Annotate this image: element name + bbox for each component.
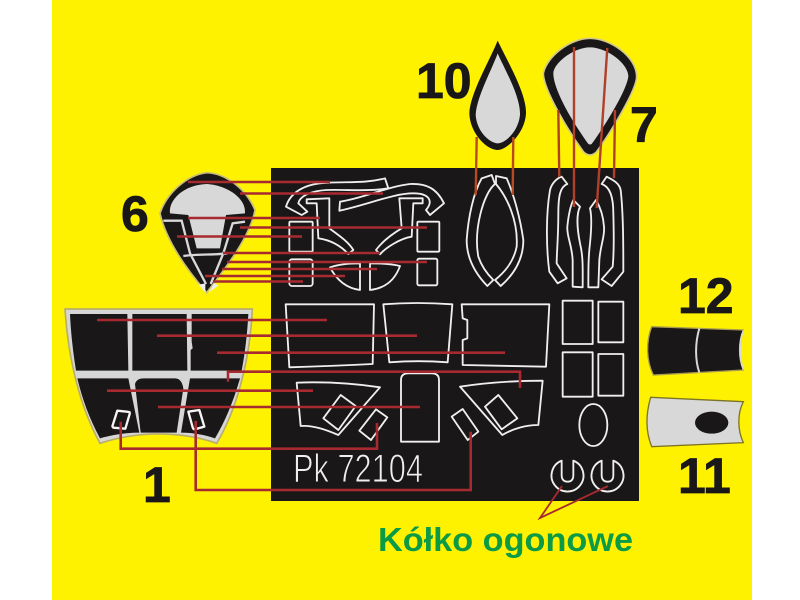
mask outlines: small windows, oval and tail wheel rings	[551, 301, 623, 492]
part number 6: 6	[121, 186, 149, 242]
tail wheel label: Kółko ogonowe	[378, 521, 633, 558]
part 1: main canopy drawing	[65, 309, 252, 443]
part number 12: 12	[678, 268, 734, 324]
part number 10: 10	[416, 53, 472, 109]
panel: black mask sheet	[271, 168, 639, 501]
part number 7: 7	[630, 97, 658, 153]
part 7: rounded triangular window drawing	[543, 38, 637, 155]
part number 11: 11	[678, 448, 731, 504]
part 12: black tail cone drawing	[648, 327, 743, 375]
part 10: teardrop window drawing	[469, 41, 526, 150]
part 11: grey tail cone drawing	[647, 397, 743, 447]
mask outlines: part 10 and part 7 strips	[467, 175, 623, 287]
part number 1: 1	[143, 457, 171, 513]
leader lines: parts 10 and 7 to masks	[476, 47, 615, 208]
mask outlines: upper group	[286, 178, 444, 290]
mask outlines: canopy panels	[286, 303, 549, 442]
leader lines: part 6 to masks	[177, 182, 427, 282]
leader lines: part 1 to masks	[97, 320, 520, 490]
leader lines: tail wheel label	[540, 486, 608, 518]
part 6: windscreen drawing	[160, 173, 255, 293]
sheet code label: Pk 72104	[293, 447, 423, 491]
